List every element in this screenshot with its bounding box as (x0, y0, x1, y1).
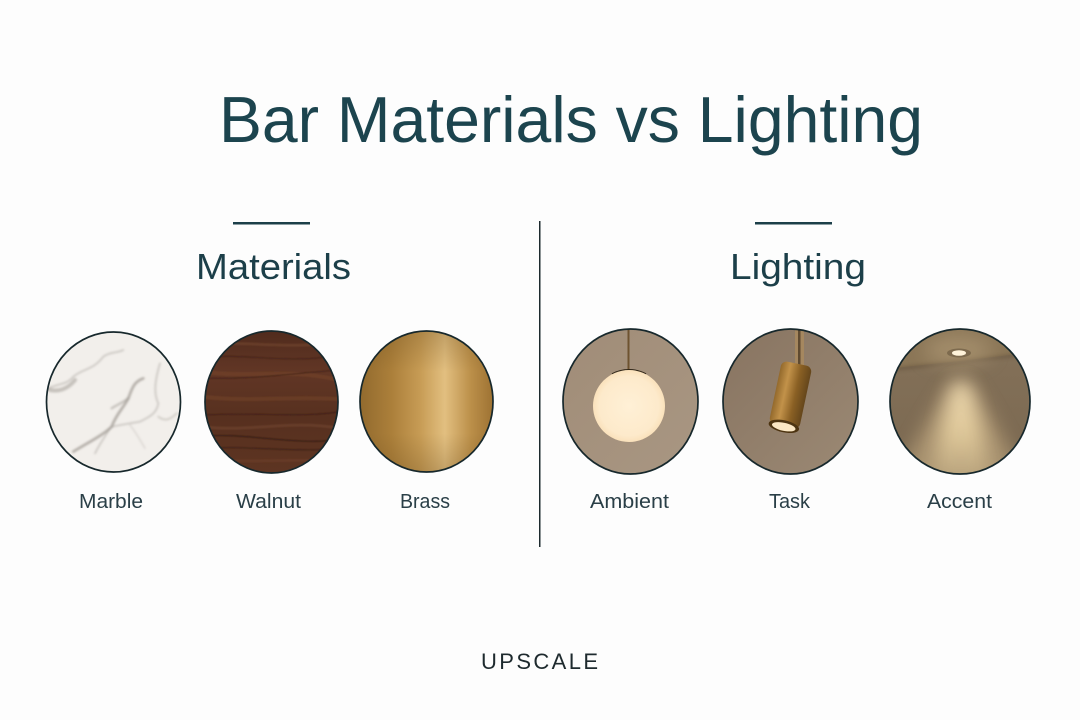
label: accent: Accent (927, 491, 992, 513)
label: task: Task (769, 491, 811, 513)
label: marble: Marble (79, 491, 143, 513)
lighting: accent (885, 325, 1035, 513)
material: marble (46, 331, 182, 508)
panel: materials (40, 222, 500, 513)
label: ambient: Ambient (590, 491, 669, 513)
title: Bar Materials vs Lighting (219, 83, 923, 156)
brand logo: UPSCALE: UPSCALE (481, 649, 598, 674)
label: walnut: Walnut (236, 491, 301, 513)
lighting: ambient (562, 328, 699, 508)
lighting: task (722, 328, 859, 508)
lighting heading: Lighting (730, 246, 866, 287)
material: brass (359, 330, 494, 508)
panel: lighting (555, 222, 1035, 513)
materials heading: Materials (196, 246, 351, 287)
material: walnut (204, 330, 339, 508)
center divider (539, 221, 540, 547)
label: brass: Brass (400, 491, 450, 513)
lighting heading (730, 222, 866, 287)
